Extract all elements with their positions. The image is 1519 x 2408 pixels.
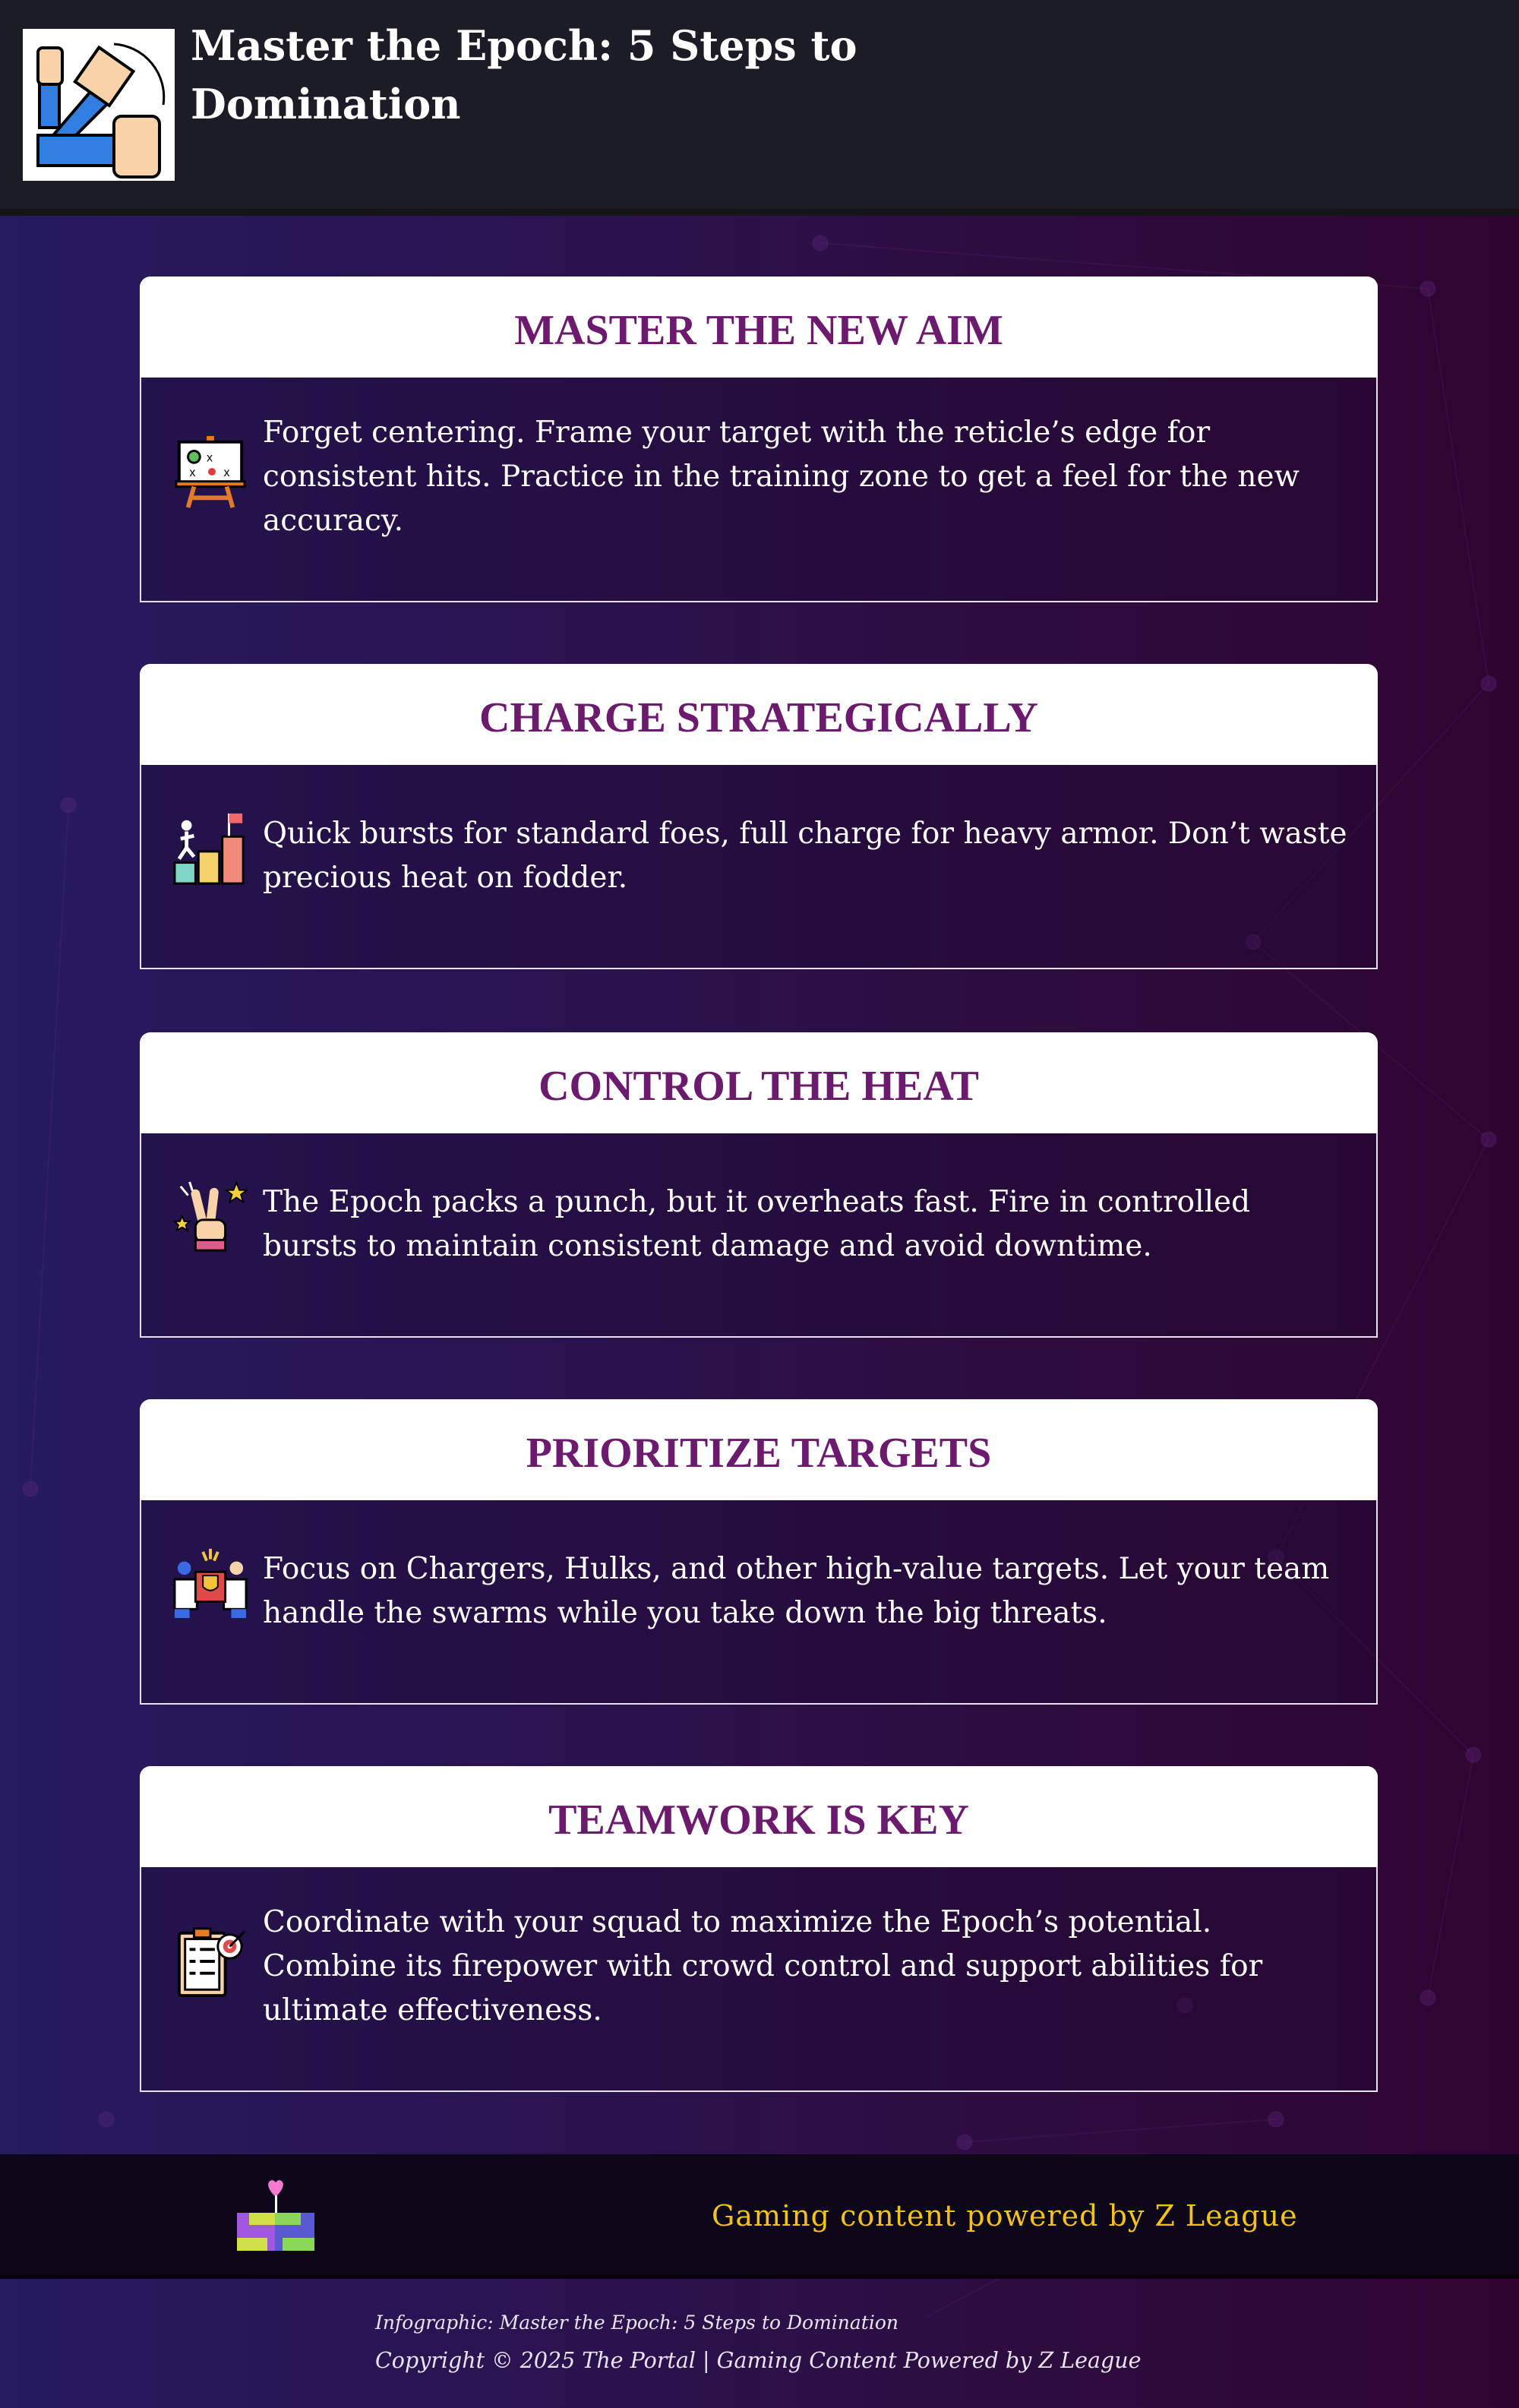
credits (375, 2312, 1141, 2373)
heading: MASTER THE NEW AIM (514, 307, 1003, 354)
text: consistent hits. Practice in the training zone to get a feel for the new (263, 460, 1300, 494)
icon: clipboard target (178, 1927, 245, 1997)
heading: PRIORITIZE TARGETS (526, 1430, 991, 1477)
credits: Copyright © 2025 The Portal | Gaming Content Powered by Z League (375, 2348, 1141, 2373)
text (263, 416, 1300, 538)
heading (140, 1399, 1378, 1500)
text: Forget centering. Frame your target with the reticle’s edge for (263, 416, 1210, 450)
text: Focus on Chargers, Hulks, and other high-value targets. Let your team (263, 1552, 1329, 1586)
title: Master the Epoch: 5 Steps to (191, 21, 857, 70)
text: Coordinate with your squad to maximize the Epoch’s potential. (263, 1905, 1211, 1939)
footer tagline: Gaming content powered by Z League (712, 2199, 1298, 2233)
heading: CHARGE STRATEGICALLY (479, 694, 1038, 741)
text: ultimate effectiveness. (263, 1993, 602, 2027)
heading: TEAMWORK IS KEY (548, 1796, 969, 1843)
title (191, 21, 857, 128)
panel: step 5 (140, 1766, 1378, 2092)
footer bar (0, 2154, 1519, 2279)
panel: step 3 (140, 1032, 1378, 1338)
text (263, 1552, 1329, 1630)
text (263, 1185, 1250, 1263)
heading (140, 277, 1378, 378)
text: bursts to maintain consistent damage and avoid downtime. (263, 1229, 1152, 1263)
text: Combine its firepower with crowd control and support abilities for (263, 1949, 1262, 1983)
icon: victory hand (173, 1180, 248, 1252)
text: The Epoch packs a punch, but it overheats fast. Fire in controlled (263, 1185, 1250, 1219)
heading (140, 664, 1378, 765)
icon: tactics board: x (207, 451, 213, 464)
text: accuracy. (263, 504, 403, 538)
icon: pixel heart block (237, 2180, 314, 2251)
panel: step 2 (140, 664, 1378, 969)
icon: team trophy (173, 1548, 248, 1618)
heading: CONTROL THE HEAT (538, 1062, 979, 1109)
heading (140, 1766, 1378, 1867)
credits: Infographic: Master the Epoch: 5 Steps to Domination (375, 2312, 898, 2334)
text: handle the swarms while you take down the big threats. (263, 1596, 1107, 1630)
icon: tactics board: x (224, 466, 230, 479)
icon: tactics board: x (190, 466, 196, 479)
icon: tactics board (175, 436, 246, 508)
title: Domination (191, 80, 460, 128)
text: precious heat on fodder. (263, 861, 627, 895)
header (0, 0, 1519, 216)
panel: step 4 (140, 1399, 1378, 1705)
panel: step 1 (140, 277, 1378, 602)
text (263, 817, 1347, 895)
icon: stairs progress (173, 813, 245, 884)
text (263, 1905, 1262, 2027)
icon: logo hands (23, 29, 175, 181)
text: Quick bursts for standard foes, full charge for heavy armor. Don’t waste (263, 817, 1347, 851)
heading (140, 1032, 1378, 1133)
